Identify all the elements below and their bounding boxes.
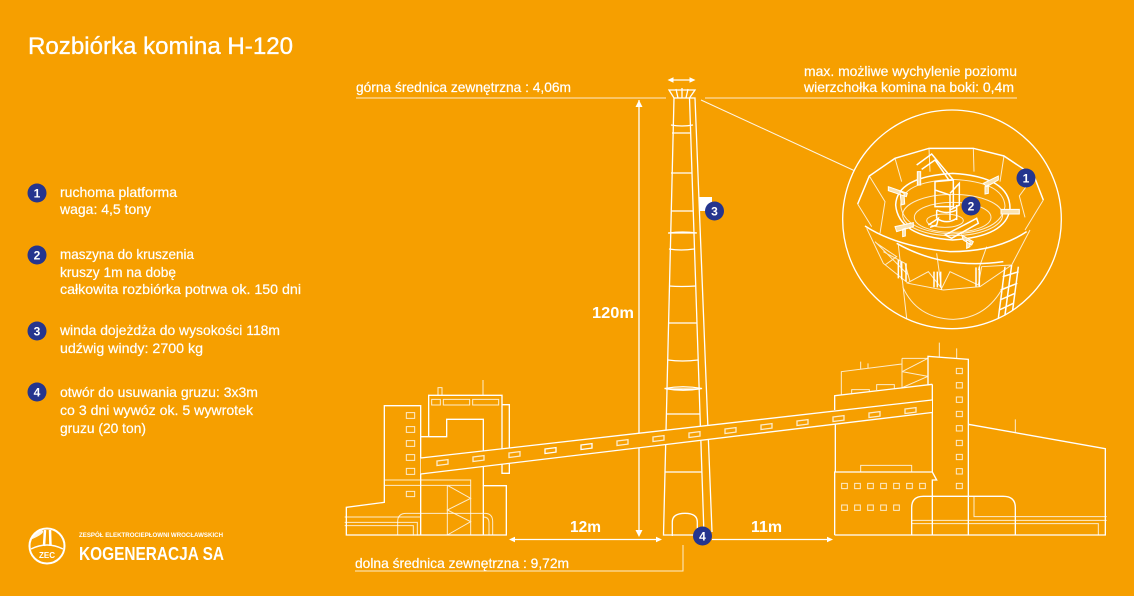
chimney shaft rings [665,125,702,472]
legend item 1: moving platform: 1 [34,186,41,200]
legend item 4: debris opening [28,382,258,436]
legend item 1: moving platform [28,184,177,217]
marker 1 on detail: 1 [1023,172,1030,186]
callout: maximum deflection: max. możliwe wychylenie poziomu [804,63,1017,79]
marker 3 on lift [705,202,724,220]
left power plant building [345,380,509,536]
conveyor belt bridge [421,400,932,474]
legend item 2: crushing machine: kruszy 1m na dobę [60,264,176,280]
logo: ZEC Kogeneracja SA: ZESPÓŁ ELEKTROCIEPŁOWNI WROCŁAWSKICH [79,530,223,539]
legend item 2: crushing machine: 2 [34,248,41,262]
dimension: distance 11m [712,519,833,542]
marker 4 on opening [693,526,712,546]
legend item 3: lift [28,322,280,356]
dimension: top diameter: górna średnica zewnętrzna : 4,06m [356,79,571,95]
marker 4 on opening: 4 [699,530,706,544]
logo: ZEC Kogeneracja SA: ZEC [39,551,55,560]
marker 1 on detail [1016,168,1036,188]
dimension: distance 12m [509,519,662,542]
crane arm [917,154,953,181]
crushing machine [935,180,959,222]
dimension: bottom diameter: dolna średnica zewnętrzna : 9,72m [355,555,569,571]
marker 2 on detail [962,196,980,216]
right power plant building [835,343,1107,535]
access ladder [998,265,1019,318]
legend [28,184,301,436]
chimney shaft [898,245,1003,319]
dimension: top diameter [356,77,696,98]
dimension: height 120m: 120m [592,305,634,322]
legend item 4: debris opening: 4 [34,386,41,400]
detail circle: chimney top [843,110,1061,329]
callout: maximum deflection: wierzchołka komina na boki: 0,4m [803,79,1014,95]
outer platform edge [858,148,1043,204]
marker 2 on detail: 2 [968,200,975,214]
callout: maximum deflection [705,63,1017,98]
chimney H-120 [664,88,712,536]
dimension: height 120m [592,100,642,537]
legend item 4: debris opening: co 3 dni wywóz ok. 5 wywrotek [60,402,254,418]
chimney top flare [669,88,695,98]
logo: ZEC Kogeneracja SA [30,528,224,564]
title: Rozbiórka komina H-120 [28,33,293,60]
marker 3 on lift: 3 [711,204,718,218]
dimension: distance 11m: 11m [751,519,782,536]
dimension: bottom diameter [355,545,683,571]
debris opening [672,513,697,536]
brackets [888,176,1019,248]
legend item 3: lift: 3 [34,324,41,338]
lift shaft [690,98,712,532]
legend item 1: moving platform: ruchoma platforma [60,184,177,200]
lift cabin [700,197,712,211]
legend item 4: debris opening: gruzu (20 ton) [60,420,146,436]
logo: ZEC Kogeneracja SA: KOGENERACJA SA [79,544,224,564]
legend item 3: lift: winda dojeżdża do wysokości 118m [59,322,280,338]
pointer line to detail [701,100,854,170]
legend item 2: crushing machine: maszyna do kruszenia [60,246,194,262]
inner ring [896,173,1010,240]
dimension: distance 12m: 12m [570,519,601,536]
legend item 1: moving platform: waga: 4,5 tony [59,201,151,217]
lower deck and truss [865,226,1027,252]
legend item 3: lift: udźwig windy: 2700 kg [60,340,203,356]
legend item 2: crushing machine [28,246,301,297]
legend item 2: crushing machine: całkowita rozbiórka potrwa ok. 150 dni [60,281,301,297]
legend item 4: debris opening: otwór do usuwania gruzu: 3x3m [60,384,258,400]
